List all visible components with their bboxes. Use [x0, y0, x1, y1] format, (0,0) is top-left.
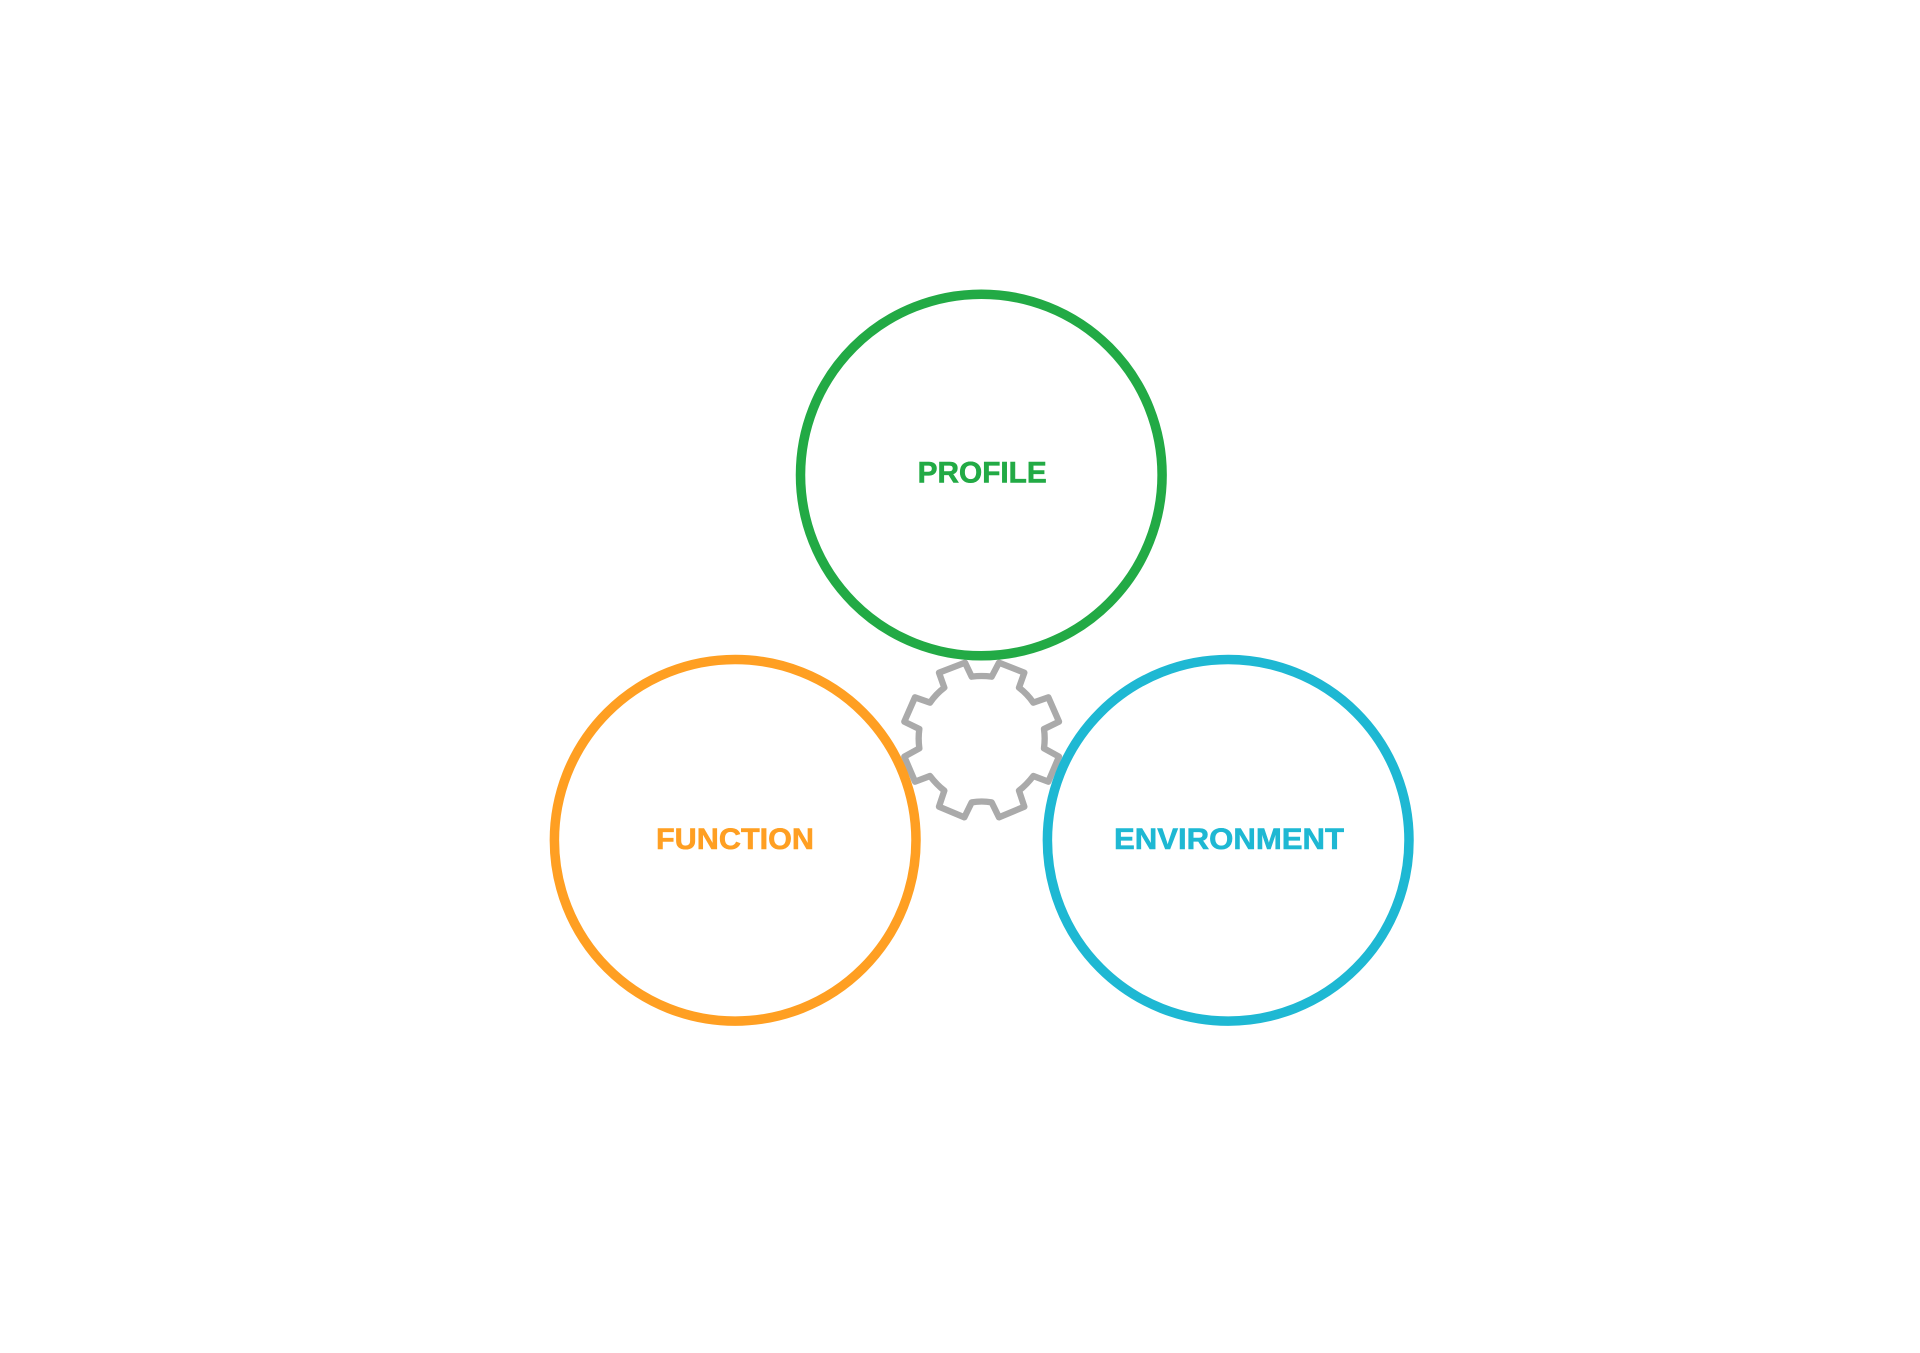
icon: central gear	[904, 663, 1059, 817]
circle: environment	[1047, 660, 1409, 1021]
circle: profile	[800, 294, 1162, 656]
label: FUNCTION: FUNCTION	[656, 823, 814, 856]
label: PROFILE: PROFILE	[918, 456, 1047, 489]
label: ENVIRONMENT: ENVIRONMENT	[1114, 823, 1344, 856]
circle: function	[554, 660, 916, 1021]
